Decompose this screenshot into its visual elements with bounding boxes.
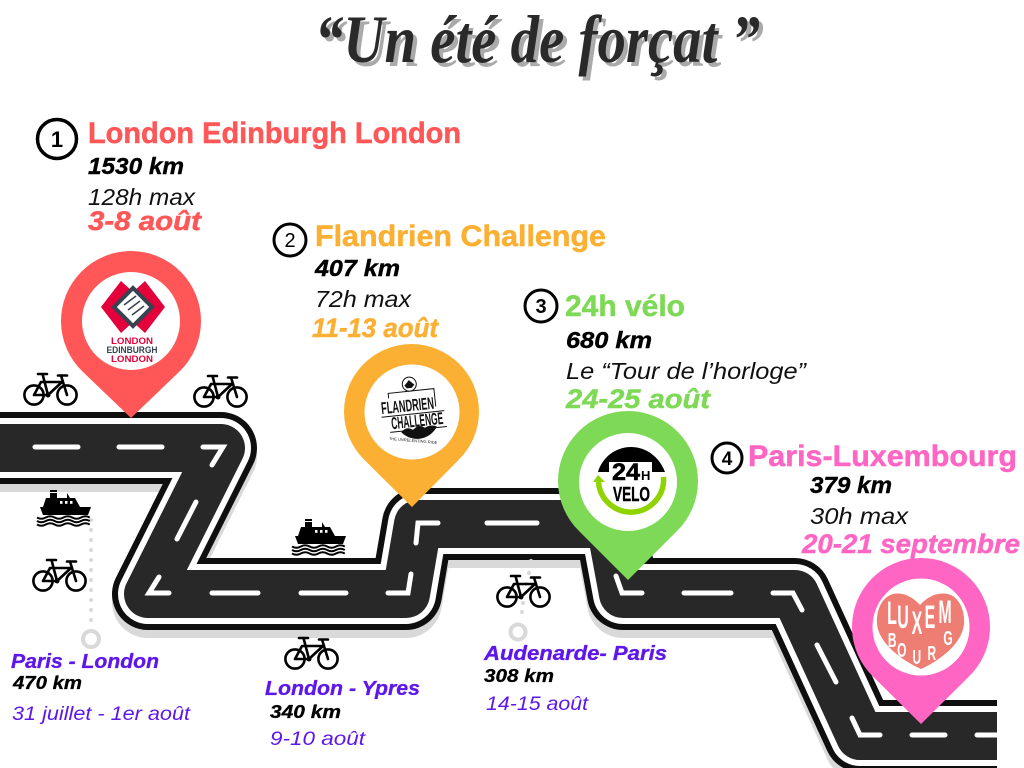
- transfer label: London - Ypres: 340 km: [270, 702, 341, 722]
- transfer label: London - Ypres: London - Ypres: [265, 678, 420, 700]
- time limit: 30h max: [810, 503, 910, 529]
- number badge 4: [712, 443, 742, 473]
- dates: 3-8 août: [88, 206, 202, 236]
- map pin with logo: LONDON: [111, 354, 153, 364]
- dotted route: Paris - London: [83, 518, 99, 647]
- icon: ferry: [37, 490, 91, 526]
- title: “Un été de forçat ”: [319, 5, 764, 81]
- transfer label: London - Ypres: [265, 678, 420, 750]
- map pin with logo: EDINBURGH: [106, 345, 158, 355]
- map pin with logo: FLANDRIEN: [380, 394, 435, 418]
- dates: 20-21 septembre: [801, 529, 1020, 559]
- number badge 1: [38, 120, 76, 158]
- map pin with logo: H: [641, 468, 650, 483]
- transfer label: Paris - London: 470 km: [12, 673, 82, 693]
- transfer label: London - Ypres: 9-10 août: [270, 729, 366, 750]
- title: “Un été de forçat ”: [315, 1, 760, 77]
- map pin with logo: LONDON: [111, 336, 153, 346]
- distance: 379 km: [810, 472, 892, 498]
- dates: 11-13 août: [312, 313, 439, 343]
- distance: 680 km: [566, 327, 652, 353]
- map pin with logo: BOURG: [888, 628, 953, 669]
- number badge 3: [525, 290, 557, 322]
- transfer label: Audenarde - Paris: 308 km: [484, 666, 554, 686]
- map pin with logo: CHALLENGE: [390, 409, 444, 433]
- panel: stage 1 London Edinburgh London: [38, 117, 461, 418]
- heading: 24h vélo: [565, 290, 685, 323]
- time limit: 128h max: [88, 184, 197, 210]
- dates: 24-25 août: [565, 384, 711, 414]
- distance: 407 km: [314, 255, 400, 281]
- map pin with logo: [344, 344, 479, 507]
- icon: bicycle: [285, 638, 338, 669]
- road: [0, 447, 1010, 744]
- number badge 2: 2: [284, 230, 296, 252]
- number badge 3: 3: [535, 296, 547, 318]
- heading: Flandrien Challenge: [315, 220, 606, 253]
- map pin with logo: 24: [612, 459, 641, 486]
- transfer label: Paris - London: Paris - London: [11, 651, 159, 673]
- map pin with logo: [852, 558, 990, 724]
- number badge 4: 4: [722, 449, 733, 470]
- map pin with logo: [558, 411, 698, 580]
- panel: stage 2 Flandrien Challenge: [274, 220, 606, 507]
- description: Le “Tour de l’horloge”: [566, 358, 807, 384]
- icon: bicycle: [24, 374, 77, 405]
- time limit: 72h max: [315, 286, 413, 312]
- map pin with logo: [61, 251, 201, 418]
- transfer label: Audenarde - Paris: [483, 643, 667, 715]
- transfer label: Audenarde - Paris: 14-15 août: [486, 694, 589, 715]
- number badge 1: 1: [51, 127, 63, 152]
- transfer label: Audenarde - Paris: Audenarde- Paris: [483, 643, 667, 665]
- transfer label: Paris - London: [11, 651, 191, 725]
- map pin with logo: VELO: [613, 484, 650, 506]
- panel: stage 3 24h vélo: [525, 290, 807, 580]
- number badge 2: [274, 224, 306, 256]
- distance: 1530 km: [88, 153, 184, 179]
- icon: ferry: [292, 519, 346, 555]
- panel: stage 4 Paris-Luxembourg: [712, 440, 1020, 724]
- heading: London Edinburgh London: [88, 117, 461, 150]
- map pin with logo: THE UNRELENTING RIDE: [389, 436, 438, 445]
- icon: bicycle: [194, 376, 247, 407]
- map pin with logo: LUXEM: [887, 595, 952, 642]
- icon: bicycle: [497, 576, 550, 607]
- dotted route: Audenarde - Paris: [510, 559, 533, 640]
- heading: Paris-Luxembourg: [748, 440, 1017, 473]
- transfer label: Paris - London: 31 juillet - 1er août: [12, 704, 191, 725]
- icon: bicycle: [33, 560, 86, 591]
